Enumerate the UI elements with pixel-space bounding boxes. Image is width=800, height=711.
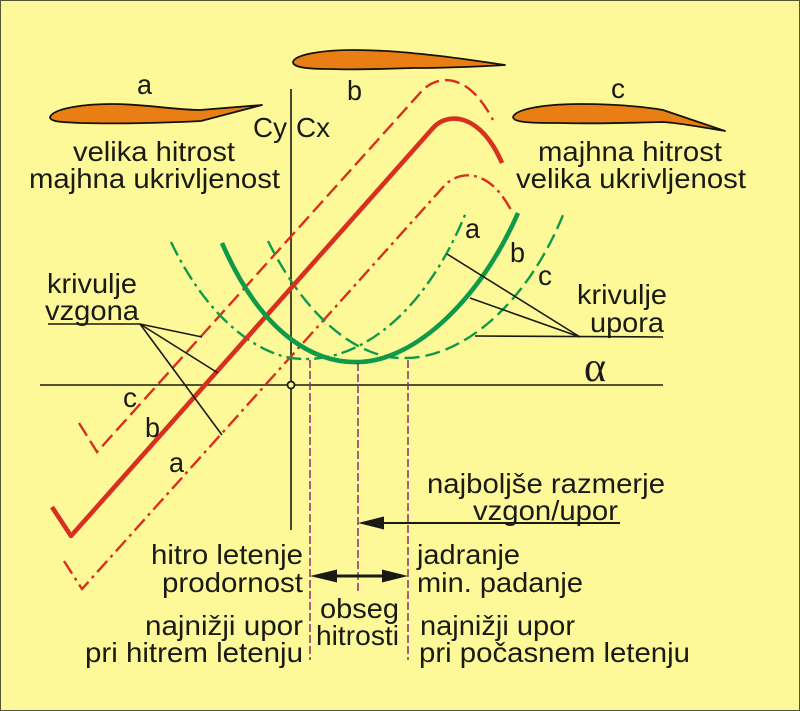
axis label Cy Cx: Cy <box>253 112 287 143</box>
airfoil a: a <box>137 69 153 100</box>
heading: low speed, high camber: majhna hitrost <box>538 136 722 167</box>
double arrow: speed range <box>310 570 408 582</box>
text: gliding: min. padanje <box>417 567 583 598</box>
text: speed range <box>316 593 399 651</box>
callout: best lift to drag ratio: vzgon/upor <box>473 495 618 526</box>
text: lowest drag slow flight <box>419 610 690 668</box>
text: speed range: hitrosti <box>316 620 399 651</box>
text: lowest drag fast flight: najnižji upor <box>145 610 303 641</box>
axis label Cy Cx: Cx <box>296 112 330 143</box>
text: speed range: obseg <box>320 593 399 624</box>
curve letters: a <box>465 213 481 244</box>
heading: low speed, high camber: velika ukrivljenost <box>516 163 746 194</box>
airfoil b <box>293 50 505 106</box>
drag curve c dashed <box>268 210 565 358</box>
curve letters: b <box>145 412 160 443</box>
label: drag curves <box>447 254 667 338</box>
label: drag curves: krivulje <box>577 279 667 310</box>
alpha label: α <box>584 345 606 391</box>
text: gliding <box>416 539 583 598</box>
curve letters: b <box>510 237 525 268</box>
airfoil c <box>513 73 725 131</box>
curve letters: c <box>538 260 552 291</box>
heading: high speed, low camber: velika hitrost <box>73 136 235 167</box>
lift curve b solid <box>52 119 502 536</box>
callout: best lift to drag ratio <box>358 468 665 530</box>
axis origin marker <box>288 382 294 388</box>
text: lowest drag slow flight: najnižji upor <box>420 610 575 641</box>
drag curve a dash-dot <box>171 210 467 359</box>
label: lift curves: krivulje <box>47 268 137 299</box>
purple guide lines <box>310 360 408 660</box>
label: drag curves: upora <box>590 307 665 338</box>
airfoil c: c <box>611 73 625 104</box>
lift curve c dashed <box>79 80 493 452</box>
heading: high speed, low camber <box>29 136 280 194</box>
text: fast flight: hitro letenje <box>151 539 303 570</box>
text: lowest drag slow flight: pri počasnem letenju <box>419 637 690 668</box>
text: gliding: jadranje <box>416 539 520 570</box>
label: lift curves: vzgona <box>45 295 140 326</box>
curve letters: a <box>169 447 185 478</box>
text: lowest drag fast flight: pri hitrem letenju <box>85 637 303 668</box>
text: fast flight <box>151 539 303 598</box>
heading: high speed, low camber: majhna ukrivljenost <box>29 163 280 194</box>
axes <box>40 89 663 530</box>
curve letters: c <box>123 382 137 413</box>
text: fast flight: prodornost <box>162 567 303 598</box>
airfoil b: b <box>347 75 362 106</box>
text: lowest drag fast flight <box>85 610 303 668</box>
curve letters <box>123 213 552 478</box>
axis label Cy Cx <box>253 112 330 143</box>
label: lift curves <box>45 268 222 435</box>
lift curve a dash-dot <box>64 175 512 589</box>
heading: low speed, high camber <box>516 136 746 194</box>
drag curve b solid <box>222 213 518 362</box>
callout: best lift to drag ratio: najboljše razmerje <box>427 468 665 499</box>
airfoil a <box>50 69 262 123</box>
